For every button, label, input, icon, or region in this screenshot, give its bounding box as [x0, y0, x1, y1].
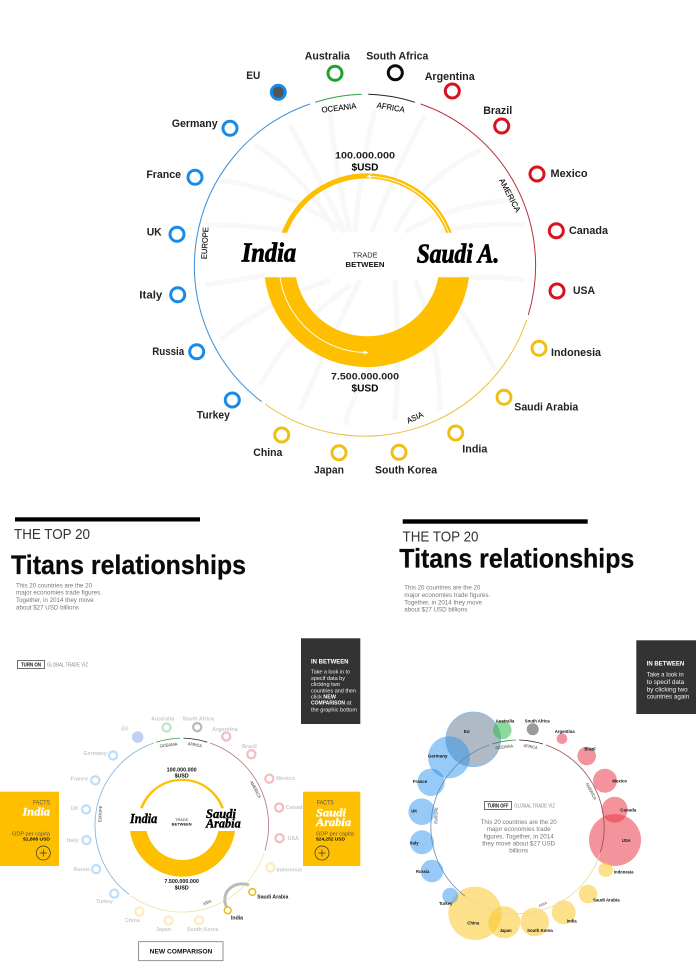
bubble labels: Germany	[428, 753, 448, 758]
toggle: turn off: TURN OFF	[488, 804, 508, 810]
toggle: turn on: TURN ON	[21, 662, 41, 668]
bubble labels: Canada	[620, 807, 637, 812]
ring arcs and region labels: ASIA	[538, 900, 548, 908]
top diagram: trade arc Saudi Arabia to India	[265, 277, 469, 367]
top diagram: region labels: OCEANIA	[321, 101, 358, 115]
kicker: THE TOP 20	[402, 528, 478, 545]
faded labels: South Korea	[187, 927, 219, 933]
facts panel: Saudi Arabia	[303, 792, 360, 866]
top diagram: country labels: Italy	[139, 290, 163, 302]
selected marker: India: India	[231, 915, 244, 921]
faded labels: Australia	[151, 716, 175, 722]
top diagram: country labels: Turkey	[197, 409, 231, 421]
top diagram: region labels: EUROPE	[200, 227, 210, 259]
callout: in between: click	[311, 695, 322, 701]
facts panel: Saudi Arabia: Saudi	[316, 805, 347, 819]
title: Titans relationships	[399, 544, 634, 574]
top diagram: country names and centre caption: BETWEEN	[346, 262, 384, 269]
button: new comparison	[138, 942, 223, 961]
callout: in between: at	[346, 701, 352, 707]
small trade labels: India	[129, 812, 157, 827]
button: new comparison: NEW COMPARISON	[150, 948, 212, 956]
facts panel: India: FACTS	[33, 801, 50, 807]
bubble chart	[408, 712, 641, 940]
bubble labels: Russia	[416, 869, 430, 874]
faded labels: Indonesia	[276, 867, 303, 873]
centre description: major economies trade	[487, 826, 551, 833]
heading rule	[403, 519, 588, 524]
bubble labels: China	[467, 920, 480, 925]
facts panel: Saudi Arabia: FACTS	[317, 801, 334, 807]
facts panel: India: GDP per capita	[12, 832, 51, 838]
selected marker: India	[224, 907, 244, 921]
ring arcs and region labels: AMERICA	[585, 782, 598, 801]
faded labels: Mexico	[276, 776, 296, 782]
faded labels: UK	[71, 806, 78, 812]
ring arcs and region labels: EUROPE	[433, 807, 439, 824]
centre description: This 20 countries are the 20	[481, 819, 557, 826]
bubble labels: Indonesia	[614, 870, 634, 875]
top diagram: country names and centre caption: Saudi A.	[417, 238, 499, 268]
bubble labels: EU	[464, 729, 470, 734]
facts panel: Saudi Arabia: Arabia	[315, 815, 351, 829]
ring arcs and region labels	[431, 740, 604, 914]
top diagram: country labels: Indonesia	[551, 347, 602, 359]
top diagram: trade values: $USD	[352, 382, 379, 394]
bubbles	[408, 712, 641, 940]
top diagram: country labels: Japan	[314, 464, 344, 476]
top diagram: country labels: Saudi Arabia	[514, 401, 579, 413]
callout: in between	[301, 638, 360, 724]
top diagram: trade values: 7.500.000.000	[331, 371, 399, 382]
top diagram: country labels: South Africa	[366, 50, 429, 62]
selected marker: Saudi Arabia	[249, 889, 289, 900]
callout: in between: countries and then	[311, 689, 356, 695]
arrow: flow direction on lower arc	[280, 277, 368, 354]
top diagram: country labels: Brazil	[483, 105, 512, 117]
bubble labels: USA	[622, 838, 631, 843]
callout: in between: COMPARISON	[311, 701, 345, 707]
toggle: turn on	[18, 660, 88, 668]
callout: in between: countries again	[647, 694, 690, 701]
small trade labels: 100.000.000	[167, 768, 197, 774]
top diagram: country labels	[139, 50, 609, 476]
bubble labels: Japan	[500, 928, 512, 933]
intro text: about $27 USD billions	[404, 607, 467, 614]
faded labels: China	[125, 918, 141, 924]
toggle: turn on: GLOBAL TRADE VIZ	[47, 662, 88, 668]
bubble labels: Saudi Arabia	[593, 897, 620, 902]
heading rule	[15, 517, 200, 522]
top diagram: country names and centre caption: India	[241, 238, 296, 268]
bubble labels: UK	[411, 808, 418, 813]
small trade labels: BETWEEN	[172, 823, 192, 827]
top diagram: region ring	[194, 94, 536, 436]
top diagram: region labels	[200, 101, 523, 425]
top diagram: country labels: India	[462, 443, 488, 455]
faded labels: France	[71, 777, 88, 783]
intro text: This 20 countries are the 20	[404, 585, 481, 592]
bubble labels: Brazil	[584, 747, 596, 752]
intro text: Together, in 2014 they move	[404, 599, 482, 606]
faded labels: Italy	[67, 838, 80, 844]
small trade labels	[129, 768, 241, 891]
bubble labels: Italy	[410, 841, 419, 846]
top diagram: country labels: Australia	[305, 50, 351, 62]
top diagram: country labels: Canada	[569, 225, 609, 237]
top diagram: country labels: EU	[246, 70, 260, 82]
faded labels: Canada	[286, 805, 306, 811]
callout: in between: the graphic bottom	[311, 707, 357, 713]
callout: in between: NEW	[323, 695, 337, 701]
trade arc small upper	[140, 779, 224, 808]
facts panel: Saudi Arabia: GDP per capita	[316, 832, 355, 838]
ring region labels: OCEANIA	[159, 741, 178, 748]
bubble labels	[410, 719, 637, 933]
facts panel: Saudi Arabia: $24,252 USD	[316, 836, 346, 842]
top diagram: country labels: Russia	[152, 346, 185, 358]
top diagram: country labels: South Korea	[375, 464, 438, 476]
faded labels: USA	[288, 836, 299, 842]
toggle: turn off	[484, 802, 555, 810]
callout: in between	[636, 640, 696, 714]
icon: plus	[36, 846, 50, 860]
ring arcs and region labels: OCEANIA	[495, 743, 514, 750]
intro text	[404, 585, 491, 614]
small trade labels: $USD	[175, 774, 189, 780]
small trade labels: TRADE	[175, 818, 189, 822]
callout: in between: specif data by	[311, 676, 345, 682]
top diagram: country names and centre caption: TRADE	[352, 253, 378, 260]
faded markers	[82, 723, 284, 925]
bubble labels: Mexico	[612, 778, 627, 783]
kicker: THE TOP 20	[14, 526, 90, 543]
top diagram: trade values: 100.000.000	[335, 151, 395, 162]
top diagram: region labels: ASIA	[405, 410, 425, 425]
small trade labels: 7.500.000.000	[164, 879, 199, 885]
bubble labels: South Korea	[527, 928, 553, 933]
ring region labels: EUROPE	[97, 805, 103, 822]
small trade labels: Saudi	[206, 806, 236, 821]
intro text	[16, 582, 102, 611]
centre description: billions	[509, 848, 529, 855]
background tree lines	[205, 110, 525, 425]
toggle: turn off: GLOBAL TRADE VIZ	[514, 804, 555, 810]
callout: in between: clicking two	[311, 682, 340, 688]
top diagram: country labels: China	[253, 447, 283, 459]
callout: in between: to specif data	[647, 679, 685, 686]
small trade labels: Arabia	[205, 816, 241, 831]
top diagram: country labels: UK	[147, 227, 162, 239]
ring arcs and region labels: AFRICA	[523, 743, 538, 750]
ring region labels: ASIA	[202, 898, 212, 907]
faded labels: Brazil	[242, 744, 257, 750]
callout: in between: Take a look in	[647, 671, 684, 678]
bubble labels: France	[413, 779, 428, 784]
top diagram: country names and centre caption	[241, 238, 499, 269]
panel: right infographic	[399, 519, 696, 940]
centre description: figures. Together, in 2014	[484, 833, 554, 840]
selected marker: Saudi Arabia: Saudi Arabia	[257, 894, 289, 900]
top diagram: trade values: $USD	[352, 161, 379, 173]
bubble labels: South Africa	[525, 719, 550, 724]
facts panel: India: India	[21, 804, 50, 818]
top diagram: country labels: Mexico	[550, 168, 588, 180]
intro text: about $27 USD billions	[16, 604, 79, 611]
bubble labels: Australia	[496, 719, 515, 724]
intro text: Together, in 2014 they move	[16, 597, 94, 604]
ring region labels: AFRICA	[187, 741, 203, 748]
callout: in between: by clicking two	[647, 686, 688, 693]
panel: left infographic	[0, 517, 360, 961]
faded labels: Turkey	[96, 899, 114, 905]
small trade labels: $USD	[175, 885, 189, 891]
callout: in between: Take a look in to	[311, 670, 350, 676]
top diagram: country labels: Argentina	[425, 71, 476, 83]
intro text: major economies trade figures.	[16, 590, 102, 597]
top diagram: trade arc India to Saudi Arabia	[282, 173, 452, 233]
icon: plus	[315, 846, 329, 860]
ring region labels	[97, 741, 262, 907]
callout: in between: IN BETWEEN	[311, 659, 348, 665]
top diagram: trade values	[331, 151, 399, 394]
centre description: they move about $27 USD	[482, 841, 555, 848]
faded labels: South Africa	[182, 716, 215, 722]
top diagram: region labels: AMERICA	[497, 177, 523, 214]
top diagram: country markers	[170, 66, 564, 460]
bubble labels: India	[567, 918, 577, 923]
trade arc small lower	[130, 831, 235, 877]
intro text: major economies trade figures.	[404, 592, 491, 599]
arrow: small flow direction on upper arc	[368, 174, 449, 233]
bubble labels: Argentina	[555, 729, 575, 734]
ring region labels: AMERICA	[249, 780, 262, 799]
top diagram: country labels: Germany	[172, 118, 219, 130]
ring arcs	[95, 738, 269, 912]
intro text: This 20 countries are the 20	[16, 582, 92, 590]
top diagram: country labels: USA	[573, 285, 595, 297]
callout: in between: IN BETWEEN	[647, 662, 684, 668]
selected link between India and Saudi Arabia	[225, 884, 249, 907]
ring diagram: faded countries	[67, 716, 306, 933]
bubble labels: Turkey	[439, 901, 453, 906]
centre description	[481, 819, 557, 855]
faded labels: Japan	[156, 927, 172, 933]
faded labels: Argentina	[212, 727, 239, 733]
top diagram: country labels: France	[146, 169, 181, 181]
faded labels: Germany	[83, 751, 108, 757]
top diagram: region labels: AFRICA	[376, 101, 406, 115]
facts panel: India	[0, 792, 59, 866]
faded labels: EU	[121, 726, 129, 732]
faded labels: Russia	[73, 867, 91, 873]
title: Titans relationships	[11, 550, 246, 580]
faded labels	[67, 716, 306, 933]
facts panel: India: $1,808 USD	[23, 836, 51, 842]
